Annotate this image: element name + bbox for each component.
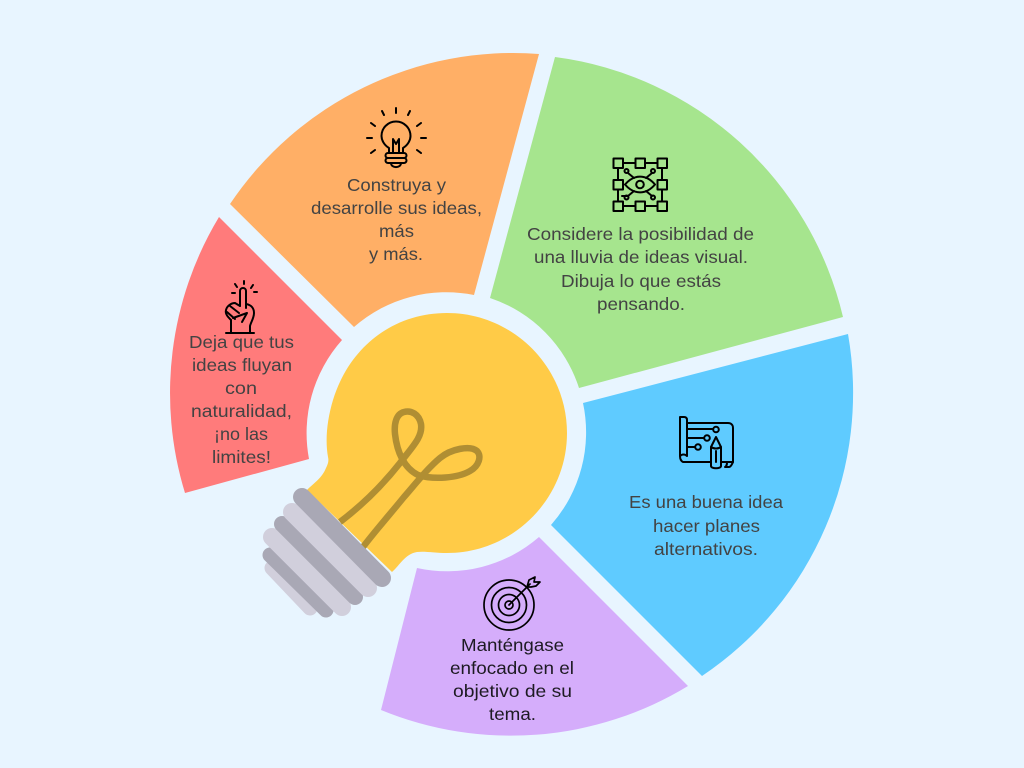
text: green segment: pensando. — [597, 294, 685, 314]
text: blue segment: hacer planes — [653, 516, 760, 536]
text: purple segment: Manténgase — [461, 635, 564, 655]
text: red segment: Deja que tus — [189, 332, 294, 352]
text: blue segment: alternativos. — [654, 539, 758, 559]
text: red segment — [189, 332, 294, 467]
text: orange segment: y más. — [369, 244, 423, 264]
text: orange segment: más — [379, 221, 414, 241]
text: red segment: ideas fluyan — [192, 355, 292, 375]
icon: light bulb — [367, 108, 426, 167]
text: green segment — [527, 224, 754, 314]
illustration: light bulb — [270, 313, 567, 610]
text: green segment: Considere la posibilidad de — [527, 224, 754, 244]
panel: green segment — [490, 57, 843, 388]
text: orange segment: Construya y — [347, 175, 446, 195]
panel: purple segment — [381, 537, 688, 736]
text: red segment: naturalidad, — [191, 401, 292, 421]
text: purple segment: tema. — [489, 704, 536, 724]
text: blue segment — [629, 492, 783, 559]
text: red segment: con — [225, 378, 257, 398]
panel: red segment — [170, 217, 342, 493]
text: orange segment — [311, 175, 482, 264]
icon: plan with pencil — [680, 417, 733, 468]
text: red segment: ¡no las — [214, 424, 268, 444]
panel: blue segment — [551, 334, 853, 676]
text: purple segment — [450, 635, 574, 724]
screw base — [270, 497, 382, 610]
text: purple segment: objetivo de su — [453, 681, 572, 701]
text: blue segment: Es una buena idea — [629, 492, 783, 512]
icon: pointing hand — [226, 281, 257, 333]
text: green segment: Dibuja lo que estás — [561, 271, 721, 291]
panel: orange segment — [230, 53, 539, 327]
text: orange segment: desarrolle sus ideas, — [311, 198, 482, 218]
text: red segment: limites! — [212, 447, 271, 467]
text: green segment: una lluvia de ideas visual. — [534, 247, 748, 267]
bulb glass — [307, 313, 567, 572]
filament — [340, 412, 479, 547]
icon: target with arrow — [484, 577, 540, 630]
icon: visual eye diagram — [614, 158, 667, 211]
text: purple segment: enfocado en el — [450, 658, 574, 678]
